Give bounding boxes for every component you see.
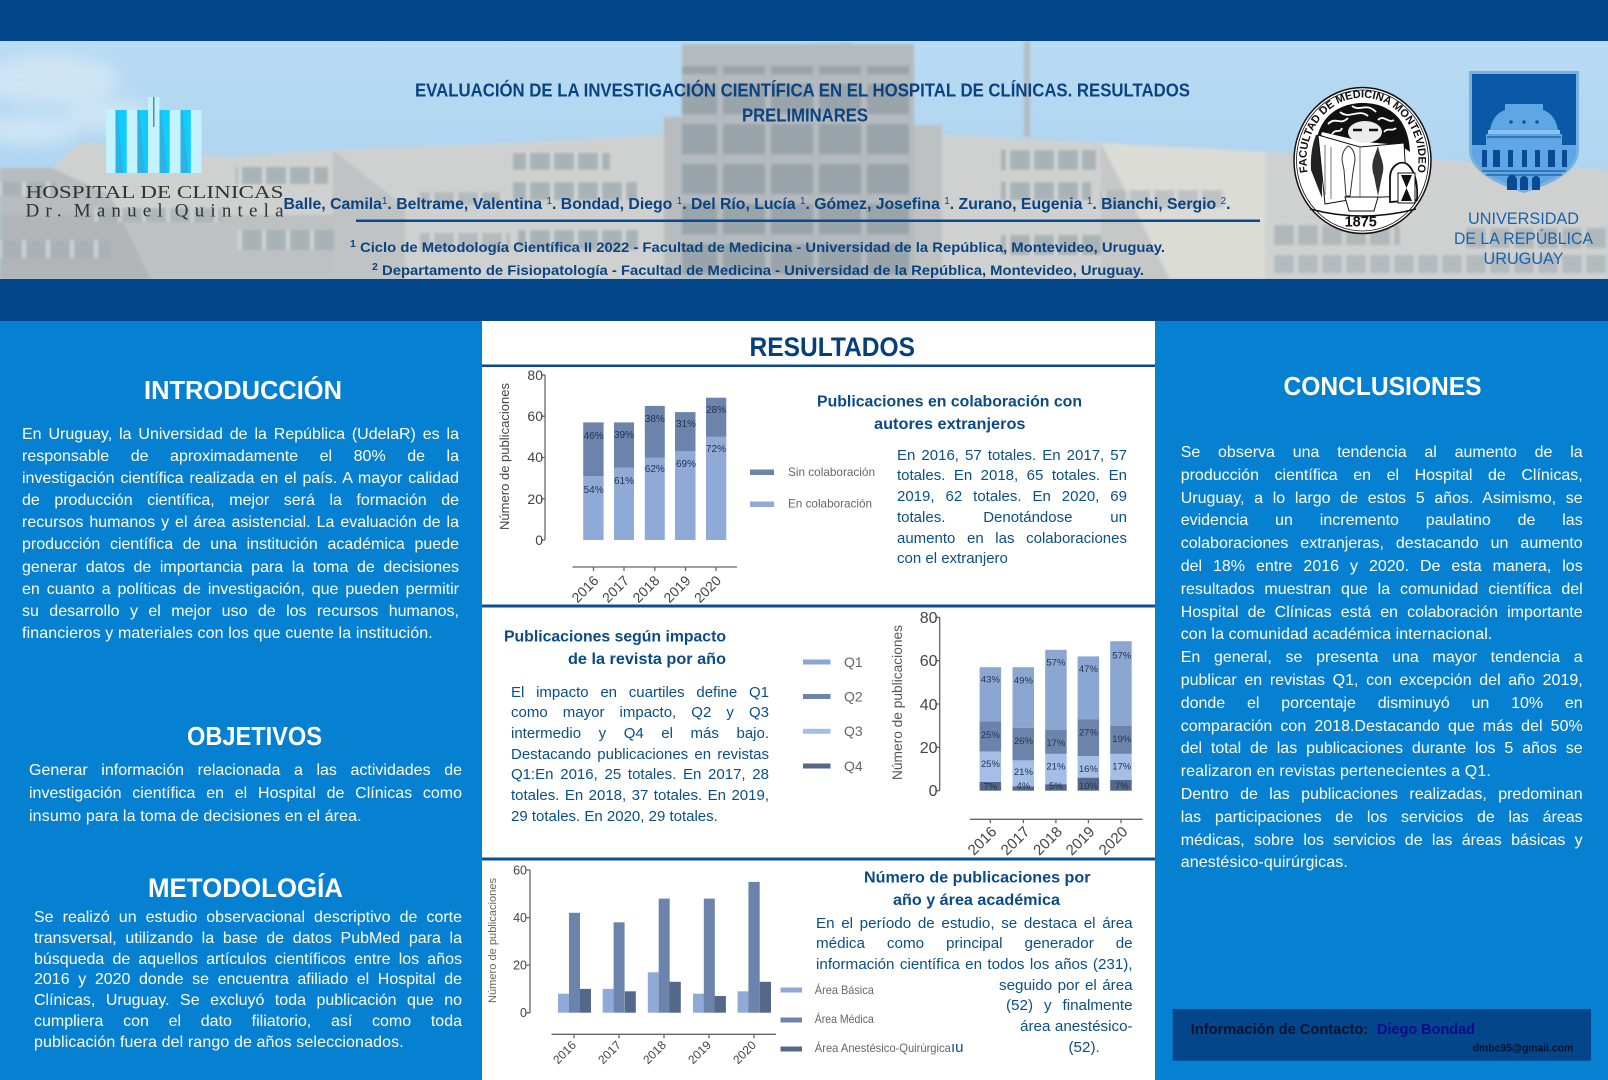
- authors: . Gómez, Josefina: [805, 196, 944, 213]
- axes: [541, 375, 737, 571]
- chart: publicaciones en colaboración: 2020: [691, 572, 724, 606]
- text block: colaboración: totales. En 2018, 65 totales. En: [897, 467, 1127, 484]
- affiliations: 2: [372, 262, 378, 273]
- chart: publicaciones en colaboración: 20: [527, 491, 543, 507]
- text block: impacto: El impacto en cuartiles define Q1: [511, 684, 769, 701]
- text block: metodología: Se realizó un estudio observacional descriptivo de corte: [34, 909, 462, 926]
- heading: área académica: Número de publicaciones por: [864, 869, 1090, 886]
- text block: conclusiones: Dentro de las publicaciones realizadas, predominan: [1181, 786, 1583, 803]
- text block: metodología: publicación fuera del rango de años seleccionados.: [34, 1034, 404, 1051]
- authors: 1: [677, 196, 683, 207]
- chart: publicaciones según cuartil: 2016: [965, 823, 1000, 859]
- affiliations: 1: [350, 239, 356, 250]
- text block: impacto: como mayor impacto, Q2 y Q3: [511, 704, 769, 721]
- chart: publicaciones por área: 20: [513, 958, 527, 972]
- affiliations: Ciclo de Metodología Científica II 2022 - Facultad de Medicina - Universidad de la República, Montevideo, Uruguay.: [356, 239, 1165, 255]
- text block: conclusiones: producción científica en el Hospital de Clínicas,: [1181, 467, 1583, 484]
- university name: DE LA REPÚBLICA: [1454, 229, 1594, 248]
- contact box: Diego Bondad: [1377, 1021, 1475, 1038]
- text block: conclusiones: Uruguay, a lo largo de estos 5 años. Asimismo, se: [1181, 490, 1583, 507]
- chart: publicaciones según cuartil: 43%: [981, 674, 1000, 686]
- chart: publicaciones por área: Número de publicaciones: [487, 878, 499, 1003]
- text block: introducción: En Uruguay, la Universidad de la República (UdelaR) es la: [22, 426, 459, 443]
- chart: publicaciones en colaboración: 2017: [599, 572, 632, 606]
- chart: publicaciones en colaboración: 60: [527, 408, 543, 424]
- chart: publicaciones según cuartil: 2017: [998, 823, 1033, 859]
- chart: publicaciones según cuartil: 7%: [984, 782, 998, 792]
- chart: publicaciones según cuartil: 25%: [981, 759, 1000, 770]
- legend: Q1: [844, 654, 863, 670]
- authors: .: [1226, 196, 1230, 213]
- text block: área académica: (52) y finalmente: [1006, 997, 1133, 1014]
- text block: metodología: [34, 909, 462, 1051]
- heading: Conclusiones: CONCLUSIONES: [1284, 371, 1482, 401]
- icon: seal Facultad de Medicina: FACULTAD DE MEDICINA MONTEVIDEO: [1299, 90, 1426, 173]
- chart: publicaciones por área: 2019: [685, 1038, 714, 1067]
- Q1: [980, 641, 1132, 730]
- top banner: [0, 0, 1608, 321]
- chart: publicaciones según cuartil: 25%: [981, 730, 1000, 741]
- text block: área académica: seguido por el área: [999, 977, 1133, 994]
- text block: metodología: 2016 y 2020 donde se encuentra afiliado el Hospital de: [34, 971, 462, 988]
- text block: introducción: generar datos de importancia para la toma de decisiones: [22, 559, 459, 576]
- authors: . Beltrame, Valentina: [387, 196, 546, 213]
- chart: publicaciones por área: 2018: [640, 1038, 669, 1067]
- text block: conclusiones: donde el porcentaje disminuyó un 10% en: [1181, 695, 1583, 712]
- hospital photo background: [0, 41, 1608, 279]
- contact box: [1173, 1009, 1591, 1061]
- authors: 1: [546, 196, 552, 207]
- chart: publicaciones en colaboración: Número de publicaciones: [497, 383, 512, 530]
- chart: publicaciones en colaboración: 31%: [676, 419, 696, 430]
- text block: impacto: Destacando publicaciones en revistas: [511, 746, 769, 763]
- chart: publicaciones según cuartil: [803, 610, 1142, 859]
- text block: colaboración: [897, 447, 1127, 567]
- university name: [1454, 209, 1594, 268]
- chart: publicaciones en colaboración: 72%: [706, 444, 726, 455]
- chart: publicaciones en colaboración: 46%: [584, 431, 604, 442]
- title: EVALUACIÓN DE LA INVESTIGACIÓN CIENTÍFICA EN EL HOSPITAL DE CLÍNICAS. RESULTADOS: [415, 80, 1190, 100]
- chart: publicaciones en colaboración: 61%: [614, 476, 634, 487]
- legend: Q4: [844, 758, 863, 774]
- chart: publicaciones por área: [487, 864, 964, 1067]
- affiliations: Departamento de Fisiopatología - Facultad de Medicina - Universidad de la República, Montevideo, Uruguay.: [378, 262, 1144, 278]
- text block: impacto: 29 totales. En 2020, 29 totales.: [511, 808, 718, 825]
- icon: seal Facultad de Medicina: [1293, 86, 1432, 234]
- authors: . Bianchi, Sergio: [1092, 196, 1221, 213]
- text block: conclusiones: realizaron en revistas pertenecientes a Q1.: [1181, 763, 1491, 780]
- heading: área académica: año y área académica: [893, 892, 1060, 909]
- chart: publicaciones por área: 2016: [550, 1038, 579, 1067]
- chart: publicaciones en colaboración: 0: [535, 532, 543, 548]
- chart: publicaciones según cuartil: 47%: [1079, 664, 1098, 675]
- text block: metodología: cumpliera con el dato filiatorio, así como toda: [34, 1013, 462, 1030]
- text block: área académica: área anestésico-: [1020, 1018, 1133, 1035]
- text block: área académica: información científica en todos los años (231),: [816, 956, 1133, 973]
- chart: publicaciones en colaboración: 2018: [629, 572, 663, 606]
- axes: [936, 617, 1142, 823]
- chart: publicaciones en colaboración: 38%: [645, 414, 665, 425]
- chart: publicaciones según cuartil: 17%: [1112, 762, 1132, 772]
- text block: colaboración: totales. Denotándose un: [897, 509, 1127, 526]
- chart: publicaciones por área: 2020: [730, 1038, 759, 1067]
- chart: publicaciones por área: 60: [513, 864, 527, 878]
- text block: metodología: transversal, utilizando la base de datos PubMed para la: [34, 930, 462, 947]
- chart: publicaciones según cuartil: 2020: [1096, 823, 1131, 859]
- text block: impacto: intermedio y Q4 el más bajo.: [511, 725, 769, 742]
- heading: área académica: [864, 869, 1090, 909]
- Área Anestésico-Quirúrgica: [580, 982, 771, 1013]
- chart: publicaciones según cuartil: 20: [920, 740, 938, 757]
- chart: publicaciones en colaboración: 28%: [706, 405, 726, 416]
- legend: [780, 982, 964, 1056]
- authors: . Bondad, Diego: [552, 196, 677, 213]
- heading: impacto: de la revista por año: [568, 651, 726, 668]
- chart: publicaciones en colaboración: 54%: [584, 485, 604, 496]
- chart: publicaciones según cuartil: Número de publicaciones: [889, 625, 905, 780]
- university name: UNIVERSIDAD: [1468, 209, 1579, 228]
- text block: colaboración: aumento en las colaboraciones: [897, 530, 1127, 546]
- text block: área académica: (52).: [1068, 1039, 1100, 1056]
- text block: objetivos: [29, 762, 462, 825]
- contact box: dmbc95@gmail.com: [1473, 1042, 1573, 1054]
- legend: Q2: [844, 688, 863, 704]
- chart: publicaciones según cuartil: 5%: [1049, 781, 1063, 792]
- authors: 1: [800, 196, 806, 207]
- chart: publicaciones según cuartil: 57%: [1046, 658, 1066, 668]
- chart: publicaciones según cuartil: 21%: [1046, 762, 1066, 772]
- icon: Hospital de Clínicas logo: [26, 97, 284, 202]
- text block: objetivos: investigación científica en el Hospital de Clínicas como: [29, 785, 462, 802]
- title: [415, 80, 1190, 126]
- authors: 1: [382, 196, 388, 207]
- text block: colaboración: con el extranjero: [897, 550, 1008, 567]
- text block: conclusiones: colaboraciones extranjeras, destacando un aumento: [1181, 535, 1583, 552]
- chart: publicaciones según cuartil: 80: [920, 610, 938, 627]
- legend: Área Básica: [815, 982, 874, 997]
- heading: Introducción: INTRODUCCIÓN: [144, 375, 342, 405]
- hospital name: HOSPITAL DE CLINICAS: [26, 182, 284, 202]
- text block: colaboración: 2019, 62 totales. En 2020, 69: [897, 488, 1127, 505]
- text block: introducción: responsable de aproximadamente el 80% de la: [22, 448, 459, 465]
- legend: En colaboración: [788, 496, 872, 510]
- chart: publicaciones por área: 0: [520, 1006, 527, 1020]
- text block: introducción: financieros y materiales con los que cuente la institución.: [22, 625, 433, 642]
- legend: [750, 465, 875, 510]
- chart: publicaciones según cuartil: 16%: [1079, 764, 1098, 775]
- text block: conclusiones: con la comunidad académica internacional.: [1181, 626, 1492, 643]
- text block: introducción: en cuanto a políticas de investigación, que pueden permitir: [22, 581, 459, 598]
- chart: publicaciones según cuartil: 2018: [1030, 823, 1066, 859]
- text block: conclusiones: las participaciones de los servicios de las áreas: [1181, 809, 1583, 826]
- seal year: 1875: [1345, 214, 1377, 230]
- affiliations: [350, 239, 1165, 278]
- text block: introducción: de producción científica, mejor será la formación de: [22, 492, 459, 509]
- text block: conclusiones: [1181, 444, 1583, 871]
- chart: publicaciones en colaboración: 80: [527, 367, 543, 383]
- legend: [803, 654, 863, 774]
- axes: [526, 870, 776, 1038]
- text block: introducción: investigación científica realizada en el país. A mayor calidad: [22, 470, 459, 487]
- text block: conclusiones: resultados muestran que la comunidad científica del: [1181, 581, 1583, 598]
- chart: publicaciones según cuartil: 21%: [1014, 767, 1033, 778]
- legend: Sin colaboración: [788, 465, 875, 479]
- text block: objetivos: Generar información relacionada a las actividades de: [29, 762, 462, 779]
- heading: colaboración: Publicaciones en colaboración con: [817, 394, 1082, 410]
- heading: Metodología: METODOLOGÍA: [148, 872, 343, 903]
- legend: Área Médica: [815, 1011, 874, 1026]
- text block: introducción: recursos humanos y el área asistencial. La evaluación de la: [22, 514, 459, 531]
- page background panels: [0, 321, 1608, 1080]
- contact box: Información de Contacto:: [1191, 1021, 1368, 1038]
- chart: publicaciones por área: 2017: [595, 1038, 624, 1067]
- authors: 1: [944, 196, 950, 207]
- authors: 2: [1221, 196, 1227, 207]
- chart: publicaciones según cuartil: 0: [929, 783, 938, 800]
- authors: Balle, Camila: [284, 196, 383, 213]
- text block: metodología: Clínicas, Uruguay. Se excluyó toda publicación que no: [34, 992, 462, 1009]
- chart: publicaciones según cuartil: 26%: [1014, 736, 1033, 747]
- chart: publicaciones en colaboración: 2016: [568, 572, 602, 606]
- chart: publicaciones en colaboración: [497, 367, 875, 606]
- text block: objetivos: insumo para la toma de decisiones en el área.: [29, 808, 362, 825]
- text block: conclusiones: Se observa una tendencia al aumento de la: [1181, 444, 1583, 461]
- chart: publicaciones por área: 40: [513, 911, 527, 925]
- text block: área académica: [816, 915, 1133, 1056]
- chart: publicaciones según cuartil: 2019: [1063, 823, 1098, 859]
- hospital subtitle: Dr. Manuel Quintela: [26, 200, 284, 222]
- authors: . Del Río, Lucía: [682, 196, 800, 213]
- chart: publicaciones en colaboración: 2019: [660, 572, 694, 606]
- chart: publicaciones en colaboración: 69%: [676, 459, 696, 470]
- text block: conclusiones: publicar en revistas Q1, con excepción del año 2019,: [1181, 672, 1583, 689]
- text block: conclusiones: comparación con 2018.Destacando que más del 50%: [1181, 718, 1583, 735]
- legend: Q3: [844, 723, 863, 739]
- authors: 1: [1087, 196, 1093, 207]
- heading: impacto: [504, 628, 726, 668]
- chart: publicaciones según cuartil: 40: [920, 697, 938, 714]
- chart: publicaciones en colaboración: 40: [527, 449, 543, 465]
- text block: conclusiones: médicas, sobre los servicios de las áreas básicas y: [1181, 832, 1583, 849]
- text block: conclusiones: En general, se presenta una mayor tendencia a: [1181, 649, 1583, 666]
- Q3: [980, 752, 1132, 786]
- text block: conclusiones: anestésico-quirúrgicas.: [1181, 854, 1348, 871]
- chart: publicaciones en colaboración: 39%: [614, 430, 634, 441]
- text block: metodología: búsqueda de aquellos artículos científicos entre los años: [34, 951, 462, 968]
- chart: publicaciones según cuartil: 27%: [1079, 728, 1098, 738]
- heading: colaboración: autores extranjeros: [874, 416, 1026, 433]
- chart: publicaciones según cuartil: 19%: [1112, 734, 1132, 745]
- legend: Área Anestésico-Quirúrgica: [815, 1040, 951, 1055]
- text block: impacto: [511, 684, 769, 825]
- text block: conclusiones: evidencia un incremento paulatino de las: [1181, 512, 1583, 529]
- chart: publicaciones según cuartil: 60: [920, 653, 938, 670]
- heading: Resultados: RESULTADOS: [750, 332, 915, 362]
- Área Básica: [558, 972, 749, 1013]
- chart: publicaciones según cuartil: 49%: [1014, 676, 1033, 686]
- text block: impacto: Q1:En 2016, 25 totales. En 2017, 28: [511, 766, 769, 783]
- text block: área académica: En el período de estudio, se destaca el área: [816, 915, 1133, 932]
- text block: introducción: su desarrollo y el mejor uso de los recursos humanos,: [22, 603, 459, 620]
- heading: impacto: Publicaciones según impacto: [504, 628, 726, 646]
- text block: colaboración: En 2016, 57 totales. En 2017, 57: [897, 447, 1127, 464]
- legend: ıu: [951, 1039, 964, 1056]
- text block: introducción: producción científica de una institución académica puede: [22, 536, 459, 553]
- text block: introducción: [22, 426, 460, 642]
- title: PRELIMINARES: [742, 106, 868, 126]
- university name: URUGUAY: [1484, 249, 1564, 268]
- chart: publicaciones en colaboración: 62%: [645, 464, 665, 475]
- text block: área académica: médica como principal generador de: [816, 935, 1133, 952]
- chart: publicaciones según cuartil: 7%: [1115, 781, 1129, 792]
- chart: publicaciones según cuartil: 10%: [1079, 781, 1098, 792]
- text block: impacto: totales. En 2018, 37 totales. En 2019,: [511, 787, 769, 804]
- Q4: [980, 778, 1132, 791]
- chart: publicaciones según cuartil: 57%: [1112, 650, 1132, 662]
- chart: publicaciones según cuartil: 17%: [1046, 738, 1066, 749]
- Área Médica: [569, 882, 760, 1013]
- heading: Objetivos: OBJETIVOS: [187, 721, 322, 751]
- text block: conclusiones: del total de las publicaciones durante los 5 años se: [1181, 740, 1583, 757]
- authors: . Zurano, Eugenia: [950, 196, 1087, 213]
- heading: colaboración: [817, 394, 1082, 433]
- Q2: [980, 719, 1132, 760]
- chart: publicaciones según cuartil: 4%: [1017, 781, 1031, 792]
- icon: Universidad de la República shield: [1454, 71, 1594, 268]
- text block: conclusiones: del 18% entre 2016 y 2020. De esta manera, los: [1181, 558, 1583, 575]
- text block: conclusiones: Hospital de Clínicas está en colaboración importante: [1181, 604, 1583, 621]
